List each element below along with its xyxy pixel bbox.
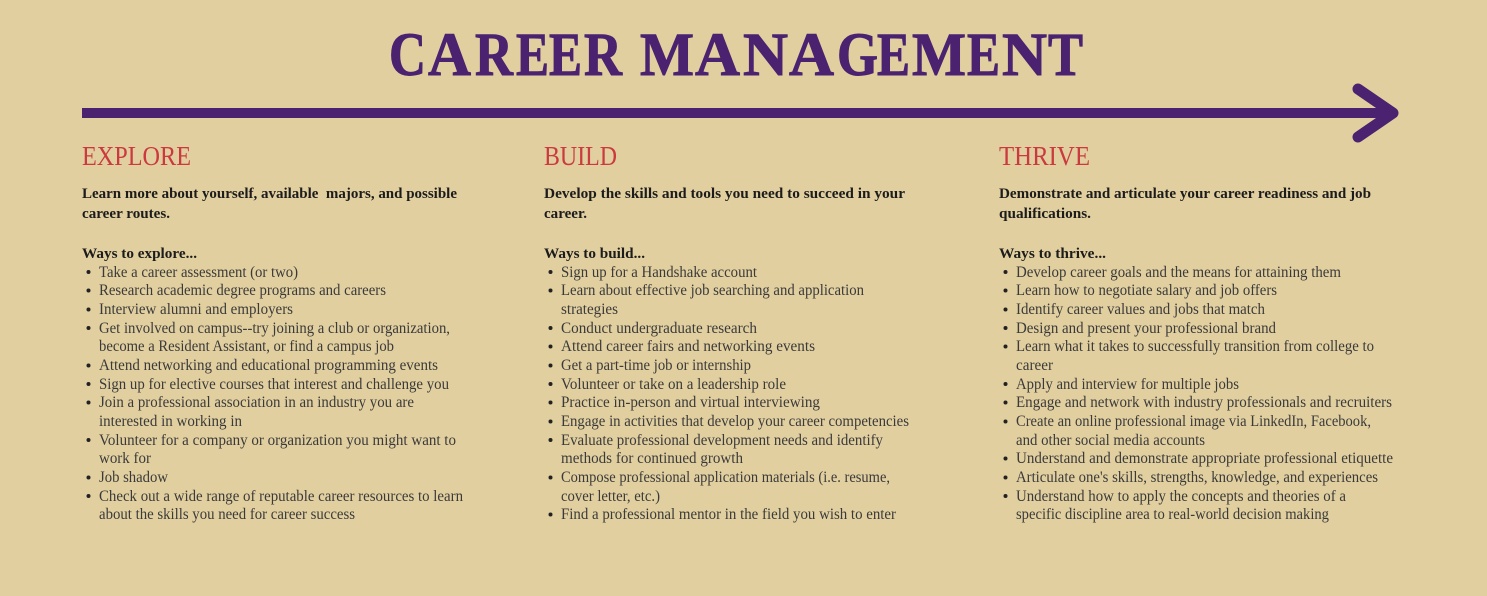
panel: explore — [82, 141, 463, 523]
title: M — [640, 22, 694, 89]
list: ways to explore: about the skills you need for career success — [99, 506, 355, 523]
list: ways to build: cover letter, etc.) — [561, 488, 660, 505]
panel: thrive — [999, 141, 1393, 523]
subheading: ways to explore: Ways to explore... — [82, 246, 197, 262]
list: ways to build: Practice in-person and virtual interviewing — [561, 394, 820, 411]
text block: explore description — [82, 186, 457, 222]
title: E — [549, 22, 582, 89]
list: ways to thrive: Apply and interview for multiple jobs — [1016, 376, 1239, 393]
list: ways to build: Evaluate professional development needs and identify — [561, 432, 883, 449]
list: ways to explore: become a Resident Assistant, or find a campus job — [99, 338, 394, 355]
title: N — [1002, 22, 1047, 89]
subheading: ways to thrive: Ways to thrive... — [999, 246, 1106, 262]
list: ways to thrive: Learn what it takes to successfully transition from college to — [1016, 338, 1374, 355]
list: ways to build: Find a professional mentor in the field you wish to enter — [561, 506, 897, 523]
list: ways to thrive: and other social media accounts — [1016, 432, 1205, 449]
list: ways to build — [548, 264, 909, 523]
heading: explore: EXPLORE — [82, 141, 191, 171]
text block: thrive description — [999, 186, 1371, 222]
list: ways to build: Learn about effective job searching and application — [561, 282, 864, 299]
heading: build: BUILD — [544, 141, 617, 171]
title: E — [877, 22, 910, 89]
title: E — [967, 22, 1000, 89]
list: ways to thrive: Understand how to apply the concepts and theories of a — [1016, 488, 1346, 505]
title: N — [743, 22, 788, 89]
list: ways to thrive — [1004, 264, 1393, 523]
list: ways to build: Attend career fairs and networking events — [561, 338, 815, 355]
title: A — [789, 22, 834, 89]
list: ways to explore: Join a professional association in an industry you are — [99, 394, 414, 411]
text block: build description — [544, 186, 905, 222]
list: ways to explore: work for — [99, 450, 152, 467]
list: ways to build: methods for continued growth — [561, 450, 743, 467]
text block: build description: career. — [544, 206, 587, 222]
list: ways to explore: Sign up for elective courses that interest and challenge you — [99, 376, 449, 393]
list: ways to explore — [86, 264, 463, 523]
list: ways to thrive: Learn how to negotiate salary and job offers — [1016, 282, 1277, 299]
panel: build — [544, 141, 909, 523]
list: ways to build: Compose professional application materials (i.e. resume, — [561, 469, 890, 486]
list: ways to thrive: Develop career goals and the means for attaining them — [1016, 264, 1341, 281]
list: ways to thrive: Engage and network with industry professionals and recruiters — [1016, 394, 1392, 411]
list: ways to explore: Get involved on campus--try joining a club or organization, — [99, 320, 450, 337]
list: ways to build: Engage in activities that develop your career competencies — [561, 413, 909, 430]
list: ways to thrive: Identify career values and jobs that match — [1016, 301, 1265, 318]
list: ways to explore: Job shadow — [99, 469, 169, 486]
arrow — [82, 89, 1393, 137]
title: M — [912, 22, 966, 89]
list: ways to explore: Take a career assessment (or two) — [99, 264, 298, 281]
subheading: ways to build: Ways to build... — [544, 246, 645, 262]
title: G — [837, 22, 878, 89]
list: ways to build: Sign up for a Handshake account — [561, 264, 758, 281]
list: ways to thrive: Design and present your professional brand — [1016, 320, 1276, 337]
list: ways to build: Volunteer or take on a leadership role — [561, 376, 786, 393]
list: ways to thrive: Create an online professional image via LinkedIn, Facebook, — [1016, 413, 1371, 430]
list: ways to explore: interested in working in — [99, 413, 242, 430]
list: ways to explore: Volunteer for a company or organization you might want to — [99, 432, 456, 449]
heading: thrive: THRIVE — [999, 141, 1090, 171]
title: A — [695, 22, 740, 89]
text block: explore description: career routes. — [82, 206, 170, 222]
text block: build description: Develop the skills and tools you need to succeed in your — [544, 186, 905, 202]
list: ways to thrive: Articulate one's skills, strengths, knowledge, and experiences — [1016, 469, 1378, 486]
list: ways to explore: Attend networking and educational programming events — [99, 357, 438, 374]
title: R — [584, 22, 623, 89]
list: ways to thrive: specific discipline area to real-world decision making — [1016, 506, 1329, 523]
text block: explore description: Learn more about yourself, available majors, and possible — [82, 186, 457, 202]
list: ways to build: strategies — [561, 301, 618, 318]
title: T — [1048, 22, 1083, 89]
list: ways to thrive: career — [1016, 357, 1054, 374]
list: ways to thrive: Understand and demonstrate appropriate professional etiquette — [1016, 450, 1393, 467]
title: A — [428, 22, 471, 89]
text block: thrive description: qualifications. — [999, 206, 1091, 222]
title: C — [389, 22, 426, 89]
title: R — [475, 22, 514, 89]
text block: thrive description: Demonstrate and articulate your career readiness and job — [999, 186, 1371, 202]
list: ways to build: Conduct undergraduate research — [561, 320, 757, 337]
title: E — [516, 22, 549, 89]
list: ways to explore: Research academic degree programs and careers — [99, 282, 386, 299]
list: ways to build: Get a part-time job or internship — [561, 357, 751, 374]
list: ways to explore: Check out a wide range of reputable career resources to learn — [99, 488, 463, 505]
list: ways to explore: Interview alumni and employers — [99, 301, 293, 318]
